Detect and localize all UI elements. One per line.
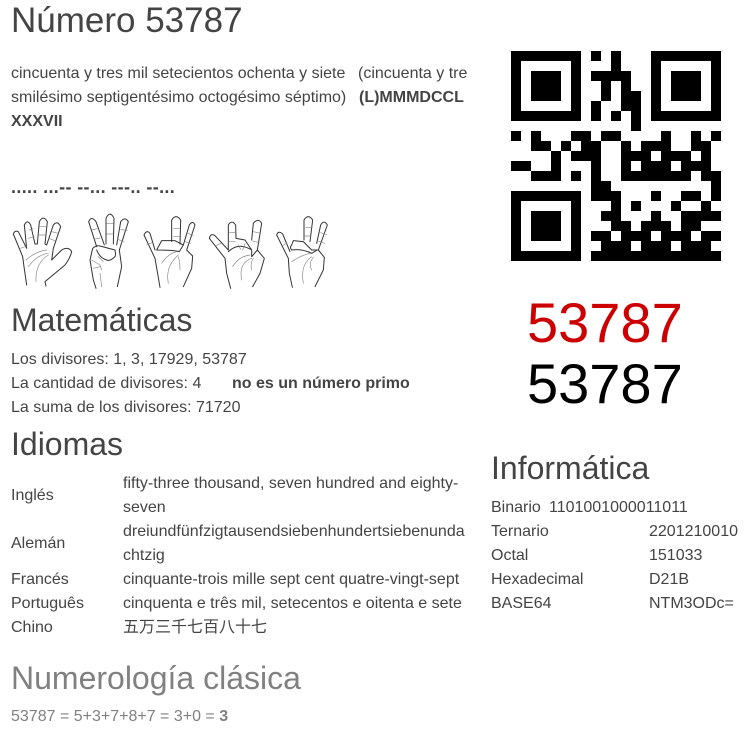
numerology formula: 53787 = 5+3+7+8+7 = 3+0 = 3 [11,708,228,725]
heading: Matemáticas: Matemáticas [11,302,192,338]
panel: languages table: Chino [11,619,53,636]
heading: Informática: Informática [491,450,649,486]
number description text: cincuenta y tres mil setecientos ochenta y siete [11,65,345,82]
heading: Idiomas: Idiomas [11,426,123,462]
panel: languages table: cinquante-trois mille sept cent quatre-vingt-sept [123,571,459,588]
number description text: (L)MMMDCCL [359,89,464,106]
panel: languages table: dreiundfünfzigtausendsiebenhundertsiebenunda [123,523,465,540]
panel: computing table: D21B [649,571,689,588]
panel: computing table: 2201210010 [649,523,738,540]
panel: languages table: Português [11,595,84,612]
panel: languages table: Francés [11,571,69,588]
number description text [11,65,467,130]
number description text: XXXVII [11,113,63,130]
icon: hand 4 [89,214,128,288]
panel: computing table: 151033 [649,547,702,564]
panel: math facts [11,351,410,416]
panel: languages table [11,475,465,636]
panel: math facts: no es un número primo [232,375,410,392]
panel: math facts: La cantidad de divisores: 4 [11,375,201,392]
black number: 53787 [527,352,683,415]
panel: math facts: La suma de los divisores: 71720 [11,399,240,416]
icon: hand 3 variant [209,220,264,288]
panel: computing table: Octal [491,547,528,564]
icon: hand 5 [13,218,72,286]
panel: languages table: cinquenta e três mil, setecentos e oitenta e sete [123,595,462,612]
panel: languages table: seven [123,499,166,516]
icon: hand 3 [144,217,195,287]
icon: sign language hands [12,214,328,289]
panel: computing table: Binario [491,499,541,516]
red number: 53787 [527,291,683,354]
morse code: ..... ...-- --... ---.. --... [11,177,175,197]
panel: languages table: Alemán [11,535,65,552]
heading: Numerología clásica: Numerología clásica [11,660,301,696]
number description text: (cincuenta y tre [358,65,467,82]
panel: computing table: NTM3ODc= [649,595,734,612]
panel: languages table: Inglés [11,487,54,504]
panel: computing table: 1101001000011011 [549,499,688,516]
panel: math facts: Los divisores: 1, 3, 17929, 53787 [11,351,247,368]
panel: computing table: BASE64 [491,595,551,612]
QR code [511,51,721,261]
panel: computing table [491,499,738,612]
title: Número 53787 [11,1,243,40]
panel: computing table: Hexadecimal [491,571,583,588]
panel: languages table: 五万三千七百八十七 [123,619,267,636]
number description text: smilésimo septigentésimo octogésimo séptimo) [11,89,346,106]
icon: hand 3 last [277,217,327,287]
panel: languages table: fifty-three thousand, seven hundred and eighty- [123,475,458,492]
panel: languages table: chtzig [123,547,165,564]
panel: computing table: Ternario [491,523,549,540]
